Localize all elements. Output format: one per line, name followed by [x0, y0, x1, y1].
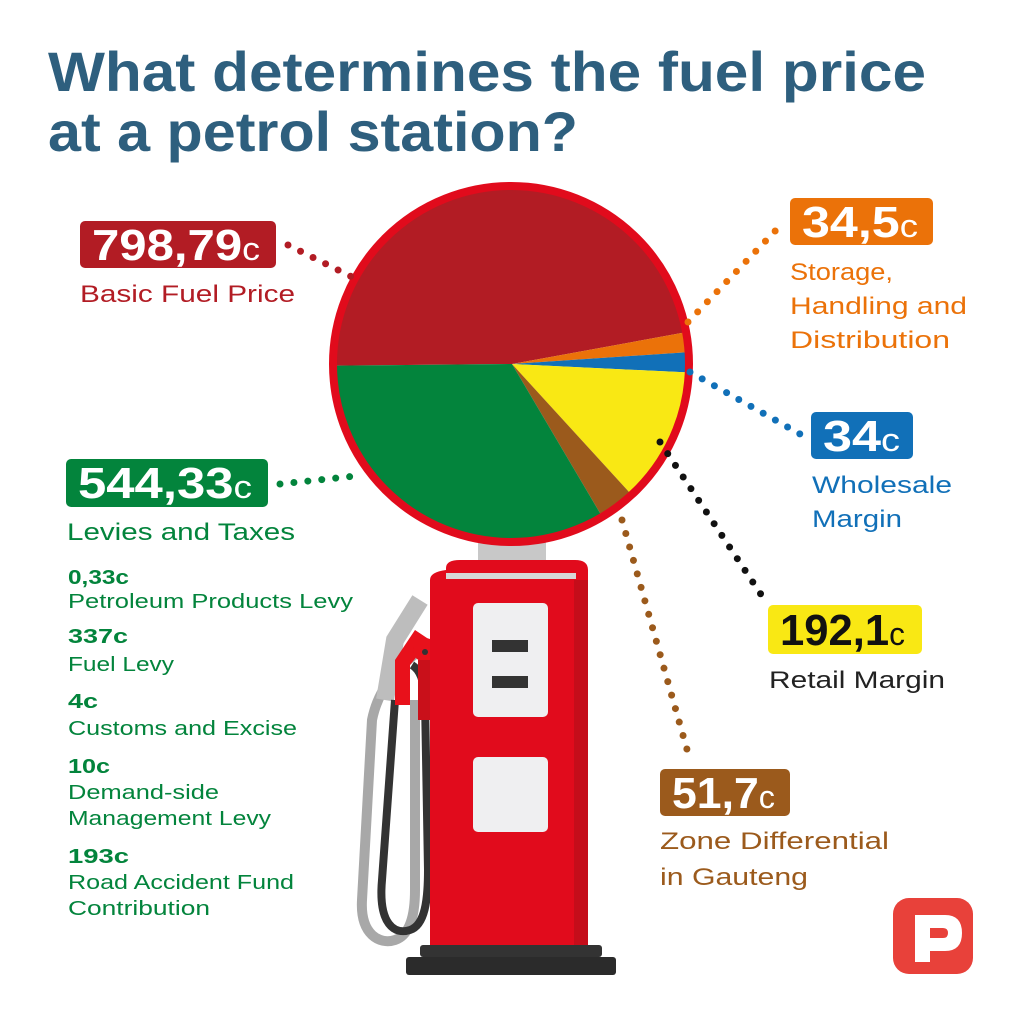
levies breakdown: Fuel Levy — [68, 654, 174, 676]
levies breakdown: 337c — [68, 626, 128, 648]
levies breakdown: Management Levy — [68, 808, 271, 830]
label: wholesale margin: Margin — [812, 506, 902, 533]
label: basic fuel price: 798,79 c — [92, 221, 260, 270]
levies breakdown — [68, 567, 353, 920]
levies breakdown: Customs and Excise — [68, 718, 297, 740]
label: storage: Storage, — [790, 259, 893, 286]
base — [420, 945, 602, 957]
label: wholesale margin: 34 c — [823, 412, 900, 461]
title: What determines the fuel price — [48, 40, 926, 103]
label: levies and taxes — [66, 459, 353, 920]
hose — [381, 665, 428, 931]
logo — [893, 898, 973, 974]
label: storage — [790, 198, 967, 354]
levies breakdown: Petroleum Products Levy — [68, 591, 353, 613]
label: retail margin: Retail Margin — [769, 667, 945, 694]
label: retail margin — [768, 605, 945, 694]
label: wholesale margin: Wholesale — [812, 472, 952, 499]
label: storage: 34,5 c — [802, 198, 918, 247]
pie chart — [329, 182, 693, 546]
display windows — [473, 603, 548, 717]
neck — [478, 538, 546, 562]
label: basic fuel price: Basic Fuel Price — [80, 281, 295, 308]
levies breakdown: Contribution — [68, 898, 210, 920]
levies breakdown: 0,33c — [68, 567, 129, 589]
hose shadow — [362, 650, 420, 941]
label: storage: Distribution — [790, 327, 950, 354]
levies breakdown: 10c — [68, 756, 110, 778]
label: levies and taxes: Levies and Taxes — [67, 519, 295, 546]
label: levies and taxes: 544,33 c — [78, 459, 252, 508]
label: wholesale margin — [811, 412, 952, 533]
title — [48, 40, 926, 163]
nozzle — [395, 630, 430, 705]
levies breakdown: Road Accident Fund — [68, 872, 294, 894]
label: storage: Handling and — [790, 293, 967, 320]
label: basic fuel price — [80, 221, 295, 308]
label: retail margin: 192,1c — [780, 606, 905, 655]
body — [430, 560, 588, 945]
fuel pump — [362, 538, 616, 975]
label: zone differential: Zone Differential — [660, 828, 889, 855]
levies breakdown: 4c — [68, 691, 98, 713]
levies breakdown: 193c — [68, 846, 129, 868]
label: zone differential — [660, 769, 889, 891]
dotted connectors — [280, 228, 800, 760]
label: zone differential: 51,7c — [672, 769, 775, 818]
label: zone differential: in Gauteng — [660, 864, 808, 891]
title: at a petrol station? — [48, 100, 578, 163]
levies breakdown: Demand-side — [68, 782, 219, 804]
